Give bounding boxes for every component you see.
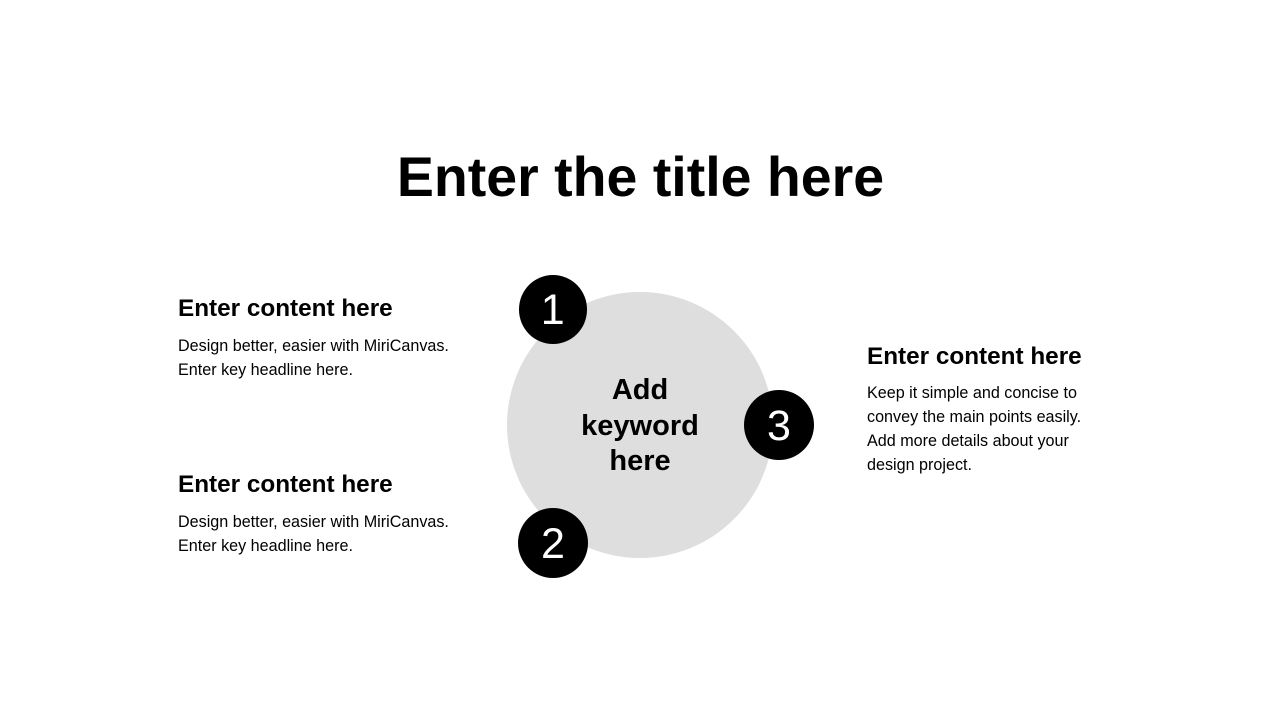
- keyword label: here: [609, 445, 671, 477]
- number badge 1: 1: [541, 286, 565, 334]
- description: item 3: convey the main points easily.: [867, 408, 1081, 426]
- description: item 1: Design better, easier with MiriCanvas.: [178, 337, 449, 355]
- description: item 3: design project.: [867, 456, 972, 474]
- heading: item 1: Enter content here: [178, 295, 393, 322]
- text block: item 3: [867, 343, 1082, 474]
- title: Enter the title here: [397, 146, 884, 208]
- description: item 3: [867, 384, 1081, 474]
- keyword label: keyword: [581, 410, 699, 442]
- number badge 1: [518, 275, 587, 344]
- number badge 2: [518, 508, 588, 578]
- keyword label: [581, 374, 699, 477]
- central grey circle: [507, 292, 773, 558]
- number badge 3: 3: [767, 402, 791, 450]
- number badge 3: [744, 390, 814, 460]
- description: item 1: [178, 337, 449, 379]
- description: item 2: Design better, easier with MiriCanvas.: [178, 513, 449, 531]
- description: item 3: Add more details about your: [867, 432, 1069, 450]
- description: item 3: Keep it simple and concise to: [867, 384, 1077, 402]
- description: item 1: Enter key headline here.: [178, 361, 353, 379]
- keyword label: Add: [612, 374, 668, 406]
- number badge 2: 2: [541, 520, 565, 568]
- heading: item 2: Enter content here: [178, 471, 393, 498]
- central diagram: [507, 275, 814, 578]
- text block: item 2: [178, 471, 449, 555]
- description: item 2: [178, 513, 449, 555]
- description: item 2: Enter key headline here.: [178, 537, 353, 555]
- heading: item 3: Enter content here: [867, 343, 1082, 370]
- text block: item 1: [178, 295, 449, 379]
